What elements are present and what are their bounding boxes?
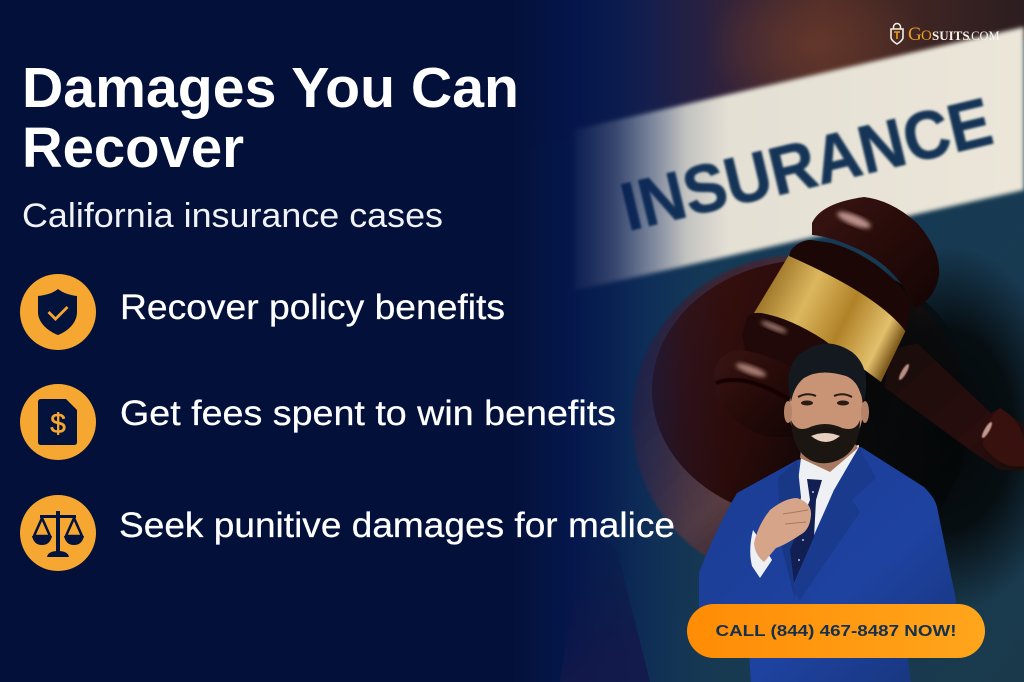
label: Recover policy benefits	[120, 288, 505, 327]
lapel and collar shading	[792, 447, 876, 600]
call-to-action button	[687, 604, 985, 658]
neck	[800, 440, 858, 472]
gavel sounding block	[632, 255, 968, 585]
item 2	[20, 384, 616, 460]
beard	[791, 420, 860, 463]
subtitle: California insurance cases	[22, 197, 443, 235]
wordmark: .COM	[968, 29, 1000, 43]
lower cap ring	[742, 313, 824, 375]
icon: document with dollar	[20, 384, 96, 460]
title: Recover	[22, 116, 244, 180]
hair	[789, 343, 866, 402]
lower cap	[714, 350, 800, 437]
lower-left navy wedge	[560, 520, 650, 682]
hand	[754, 498, 811, 562]
suit jacket	[699, 447, 956, 682]
icon: scales of justice	[20, 495, 96, 571]
call-to-action button: CALL (844) 467-8487 NOW!	[716, 623, 956, 640]
attorney portrait	[699, 343, 956, 682]
upper cap	[812, 197, 939, 309]
face	[789, 362, 863, 456]
icon: shield with check	[20, 274, 96, 350]
insurance paper strip	[573, 27, 1024, 291]
eyes	[801, 400, 849, 406]
shadow blending block into background	[820, 245, 1024, 615]
upper cap second ring	[789, 240, 911, 332]
wordmark: SUITS	[932, 28, 970, 43]
title	[22, 56, 519, 180]
wordmark: G	[908, 24, 922, 45]
label: Get fees spent to win benefits	[120, 394, 616, 433]
tie	[790, 479, 822, 583]
gavel handle	[884, 343, 1024, 470]
shirt cuff	[750, 530, 772, 578]
icon: padlock	[891, 24, 903, 44]
title: Damages You Can	[22, 56, 519, 120]
wordmark: O	[921, 28, 932, 44]
blurred INSURANCE word: INSURANCE	[614, 83, 999, 246]
gavel head	[714, 197, 939, 437]
logo	[891, 24, 1000, 45]
photo: insurance document and gavel	[520, 0, 1024, 682]
shirt	[796, 445, 859, 535]
item 1	[20, 274, 505, 350]
icon: document with dollar: $	[50, 408, 66, 439]
gold band	[754, 255, 906, 382]
item 3	[20, 495, 675, 571]
label: Seek punitive damages for malice	[119, 506, 675, 545]
